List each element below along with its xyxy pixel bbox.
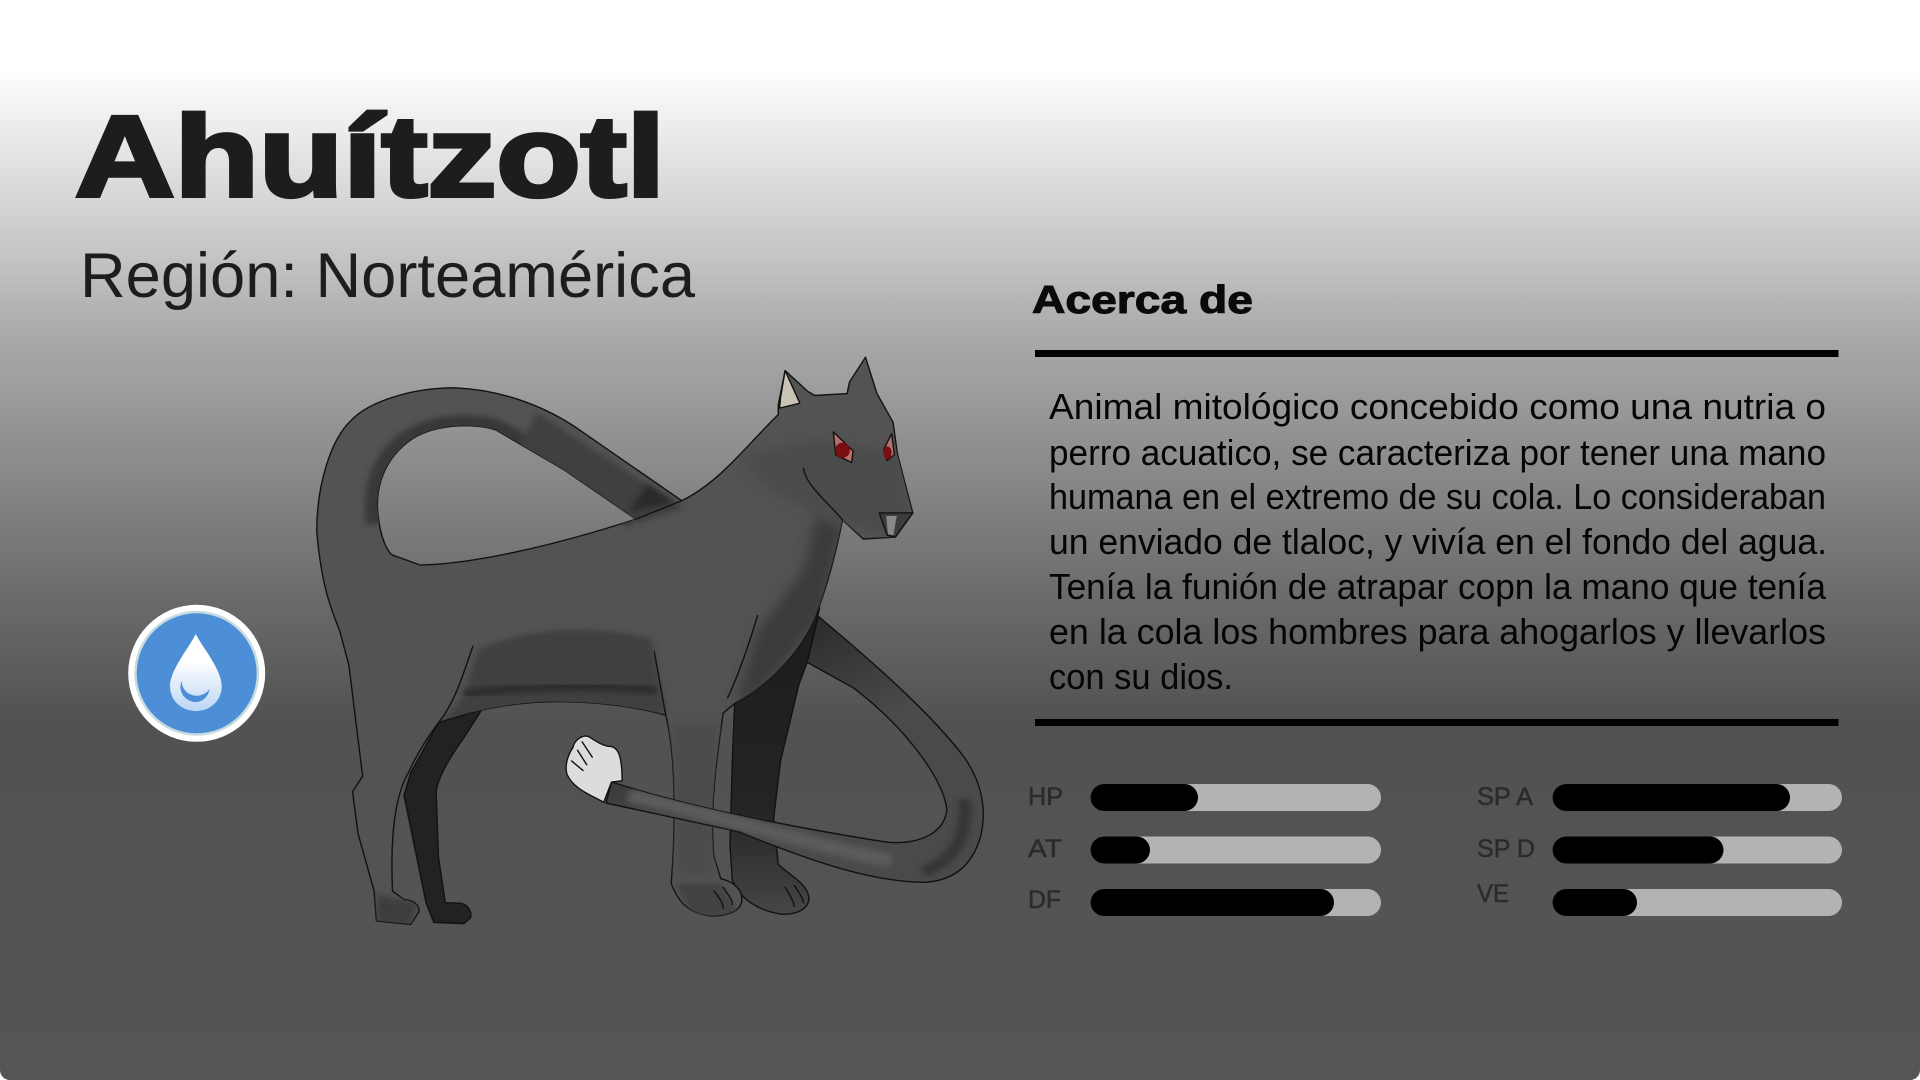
description text block: Animal mitológico concebido como una nutria o (1049, 386, 1826, 427)
stat: AT (1028, 835, 1381, 864)
description text block: con su dios. (1049, 656, 1233, 697)
body contour lines (438, 468, 843, 908)
stat: SP A: SP A (1477, 783, 1533, 811)
stat: DF: DF (1028, 886, 1061, 914)
top divider (1035, 350, 1838, 357)
description text block: perro acuatico, se caracteriza por tener una mano (1049, 432, 1826, 473)
description text block: en la cola los hombres para ahogarlos y llevarlos (1049, 611, 1826, 652)
description text block: un enviado de tlaloc, y vivía en el fondo del agua. (1049, 521, 1827, 562)
nose (879, 513, 913, 537)
hand at tail tip (566, 736, 622, 802)
title: Ahuítzotl (75, 93, 665, 221)
stat: SP A (1477, 783, 1842, 811)
description text block (1049, 386, 1827, 697)
illustration: ahuitzotl creature (317, 357, 983, 926)
stat: VE: VE (1477, 880, 1509, 908)
stat: AT: AT (1028, 835, 1062, 863)
description text block: Tenía la funión de atrapar copn la mano que tenía (1049, 566, 1827, 607)
description text block: humana en el extremo de su cola. Lo consideraban (1049, 476, 1826, 517)
bottom divider (1035, 719, 1838, 726)
stat: VE (1477, 880, 1842, 916)
far hind leg (404, 709, 482, 924)
stat: DF (1028, 886, 1381, 916)
stat: SP D (1477, 835, 1842, 864)
icon: water type badge (128, 605, 265, 742)
stat: HP (1028, 783, 1381, 811)
heading: about: Acerca de (1032, 279, 1253, 322)
lower tail (606, 616, 983, 882)
eyes (833, 432, 894, 462)
body, head and upper tail loop (317, 357, 914, 926)
far front leg (730, 608, 820, 914)
stat: SP D: SP D (1477, 835, 1535, 863)
stat: HP: HP (1028, 783, 1063, 811)
subtitle: region: Región: Norteamérica (80, 241, 696, 311)
